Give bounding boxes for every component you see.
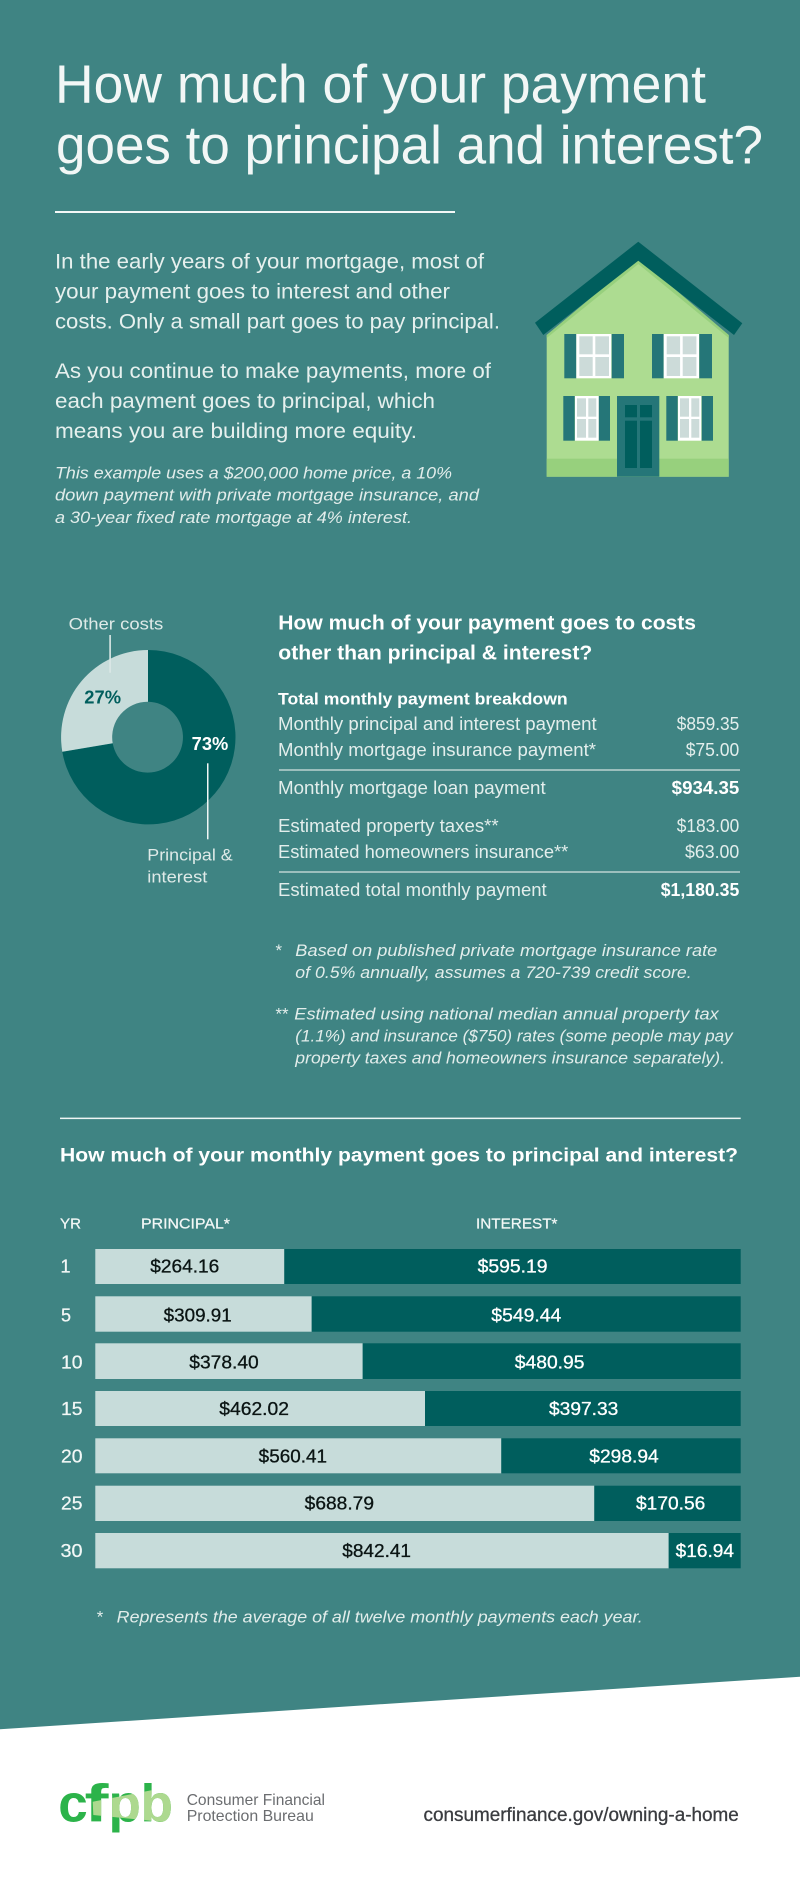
bar: year 15 bbox=[61, 1391, 741, 1426]
label: principal and interest: Principal & bbox=[147, 846, 233, 865]
bar: year 5: 5 bbox=[61, 1306, 71, 1326]
bar: year 1 bbox=[60, 1249, 741, 1284]
table heading: Total monthly payment breakdown bbox=[278, 689, 568, 708]
footnotes: insurance and tax estimates: Estimated using national median annual property tax bbox=[294, 1004, 719, 1023]
footnotes: insurance and tax estimates: (1.1%) and insurance ($750) rates (some people may pay bbox=[295, 1026, 734, 1045]
column headers bbox=[60, 1215, 558, 1232]
column headers: PRINCIPAL* bbox=[141, 1215, 230, 1232]
row: mortgage insurance: $75.00 bbox=[686, 740, 739, 760]
bar: year 20: 20 bbox=[61, 1447, 82, 1467]
logo: cfpb: f bbox=[84, 1775, 109, 1834]
slice: other costs 27% bbox=[61, 650, 148, 752]
row: homeowners insurance: Estimated homeowners insurance** bbox=[278, 842, 568, 862]
title bbox=[55, 54, 763, 176]
intro text block: costs. Only a small part goes to pay principal. bbox=[55, 311, 500, 334]
slice: principal and interest 73% bbox=[62, 650, 235, 824]
chart footnote: * bbox=[96, 1608, 104, 1627]
title: How much of your payment bbox=[55, 54, 706, 114]
row: property taxes bbox=[278, 816, 739, 836]
bar: year 20: $560.41 bbox=[259, 1447, 327, 1467]
label: other costs: Other costs bbox=[69, 614, 163, 633]
agency name bbox=[187, 1792, 325, 1825]
agency name: Consumer Financial bbox=[187, 1792, 325, 1809]
row: mortgage loan payment: $934.35 bbox=[672, 778, 739, 798]
bar: year 25 bbox=[61, 1486, 741, 1521]
footer panel bbox=[0, 1677, 800, 1885]
bar: year 25: $170.56 bbox=[636, 1494, 705, 1514]
bar: year 25: 25 bbox=[61, 1494, 82, 1514]
logo: cfpb: b bbox=[141, 1775, 173, 1834]
bar: year 10: $480.95 bbox=[515, 1353, 584, 1373]
bar: year 5: $309.91 bbox=[164, 1306, 232, 1326]
bar: year 15: $462.02 bbox=[219, 1399, 289, 1419]
row: property taxes: Estimated property taxes** bbox=[278, 816, 499, 836]
bar: year 1: $264.16 bbox=[150, 1257, 219, 1277]
footnotes: insurance and tax estimates: * bbox=[275, 941, 283, 960]
bar: year 10: $378.40 bbox=[189, 1353, 259, 1373]
bar: year 20 bbox=[61, 1438, 741, 1473]
row: principal and interest: Monthly principal and interest payment bbox=[278, 714, 597, 734]
row: mortgage loan payment bbox=[278, 778, 739, 798]
footnotes: insurance and tax estimates: of 0.5% annually, assumes a 720-739 credit score. bbox=[295, 963, 692, 982]
bar: year 25: $688.79 bbox=[305, 1494, 374, 1514]
row: total monthly payment: Estimated total monthly payment bbox=[278, 880, 547, 900]
example assumptions note: down payment with private mortgage insurance, and bbox=[55, 486, 480, 505]
heading: costs other than principal and interest bbox=[278, 612, 696, 664]
row: homeowners insurance bbox=[278, 842, 739, 862]
example assumptions note: a 30-year fixed rate mortgage at 4% interest. bbox=[55, 508, 412, 527]
row: total monthly payment: $1,180.35 bbox=[661, 880, 739, 900]
bar: year 30 bbox=[60, 1533, 741, 1568]
logo: cfpb: p bbox=[108, 1775, 141, 1834]
row: mortgage insurance bbox=[278, 740, 739, 760]
row: principal and interest bbox=[278, 714, 739, 734]
row: mortgage insurance: Monthly mortgage insurance payment* bbox=[278, 740, 596, 760]
bar: year 15: 15 bbox=[61, 1399, 82, 1419]
row: principal and interest: $859.35 bbox=[677, 714, 739, 734]
website link text: consumerfinance.gov/owning-a-home bbox=[424, 1805, 739, 1826]
bar: year 30: 30 bbox=[60, 1541, 82, 1561]
agency name: Protection Bureau bbox=[187, 1808, 314, 1825]
footnotes: insurance and tax estimates: ** bbox=[275, 1004, 289, 1023]
label: principal and interest: interest bbox=[147, 868, 208, 887]
bar: year 5 bbox=[61, 1296, 741, 1332]
footnotes: insurance and tax estimates: property taxes and homeowners insurance separately). bbox=[294, 1048, 725, 1067]
heading: costs other than principal and interest: other than principal & interest? bbox=[278, 642, 592, 664]
intro text block: In the early years of your mortgage, most of bbox=[55, 251, 484, 274]
intro text block: As you continue to make payments, more of bbox=[55, 360, 491, 383]
bar: year 5: $549.44 bbox=[491, 1306, 561, 1326]
logo: cfpb: b bbox=[141, 1775, 173, 1834]
bar: year 1: $595.19 bbox=[478, 1257, 548, 1277]
bar: year 30: $16.94 bbox=[676, 1541, 734, 1561]
table: total monthly payment breakdown bbox=[278, 689, 740, 900]
bar: year 10: 10 bbox=[61, 1353, 82, 1373]
example assumptions note: This example uses a $200,000 home price, a 10% bbox=[55, 464, 452, 483]
column headers: INTEREST* bbox=[476, 1215, 558, 1232]
value: 73%: 73% bbox=[192, 734, 228, 754]
title: goes to principal and interest? bbox=[56, 116, 763, 176]
donut chart: payment split bbox=[61, 614, 235, 887]
row: property taxes: $183.00 bbox=[677, 816, 739, 836]
logo: cfpb: p bbox=[108, 1775, 141, 1834]
row: homeowners insurance: $63.00 bbox=[685, 842, 739, 862]
intro text block: means you are building more equity. bbox=[55, 420, 417, 443]
bar: year 15: $397.33 bbox=[549, 1399, 618, 1419]
icon: house bbox=[535, 242, 742, 477]
logo: cfpb: f bbox=[84, 1775, 109, 1834]
row: total monthly payment bbox=[278, 880, 739, 900]
logo: cfpb bbox=[60, 1783, 171, 1832]
intro text block: your payment goes to interest and other bbox=[55, 281, 450, 304]
label: principal and interest bbox=[147, 846, 233, 887]
intro text block bbox=[55, 251, 500, 443]
heading: costs other than principal and interest: How much of your payment goes to costs bbox=[278, 612, 696, 634]
bar: year 10 bbox=[61, 1343, 741, 1379]
bar: year 30: $842.41 bbox=[342, 1541, 411, 1561]
example assumptions note bbox=[55, 464, 480, 527]
row: mortgage loan payment: Monthly mortgage loan payment bbox=[278, 778, 546, 798]
intro text block: each payment goes to principal, which bbox=[55, 390, 435, 413]
column headers: YR bbox=[60, 1215, 81, 1232]
heading: monthly payment split: How much of your monthly payment goes to principal and interest? bbox=[60, 1145, 738, 1166]
footnotes: insurance and tax estimates bbox=[275, 941, 734, 1067]
stacked bar chart: principal vs interest by year bbox=[60, 1215, 741, 1568]
bar: year 20: $298.94 bbox=[589, 1447, 659, 1467]
logo: cfpb: c bbox=[58, 1775, 88, 1834]
chart footnote: Represents the average of all twelve monthly payments each year. bbox=[117, 1608, 643, 1627]
value: 27%: 27% bbox=[84, 687, 121, 707]
bar: year 1: 1 bbox=[60, 1257, 71, 1277]
footnotes: insurance and tax estimates: Based on published private mortgage insurance rate bbox=[295, 941, 717, 960]
